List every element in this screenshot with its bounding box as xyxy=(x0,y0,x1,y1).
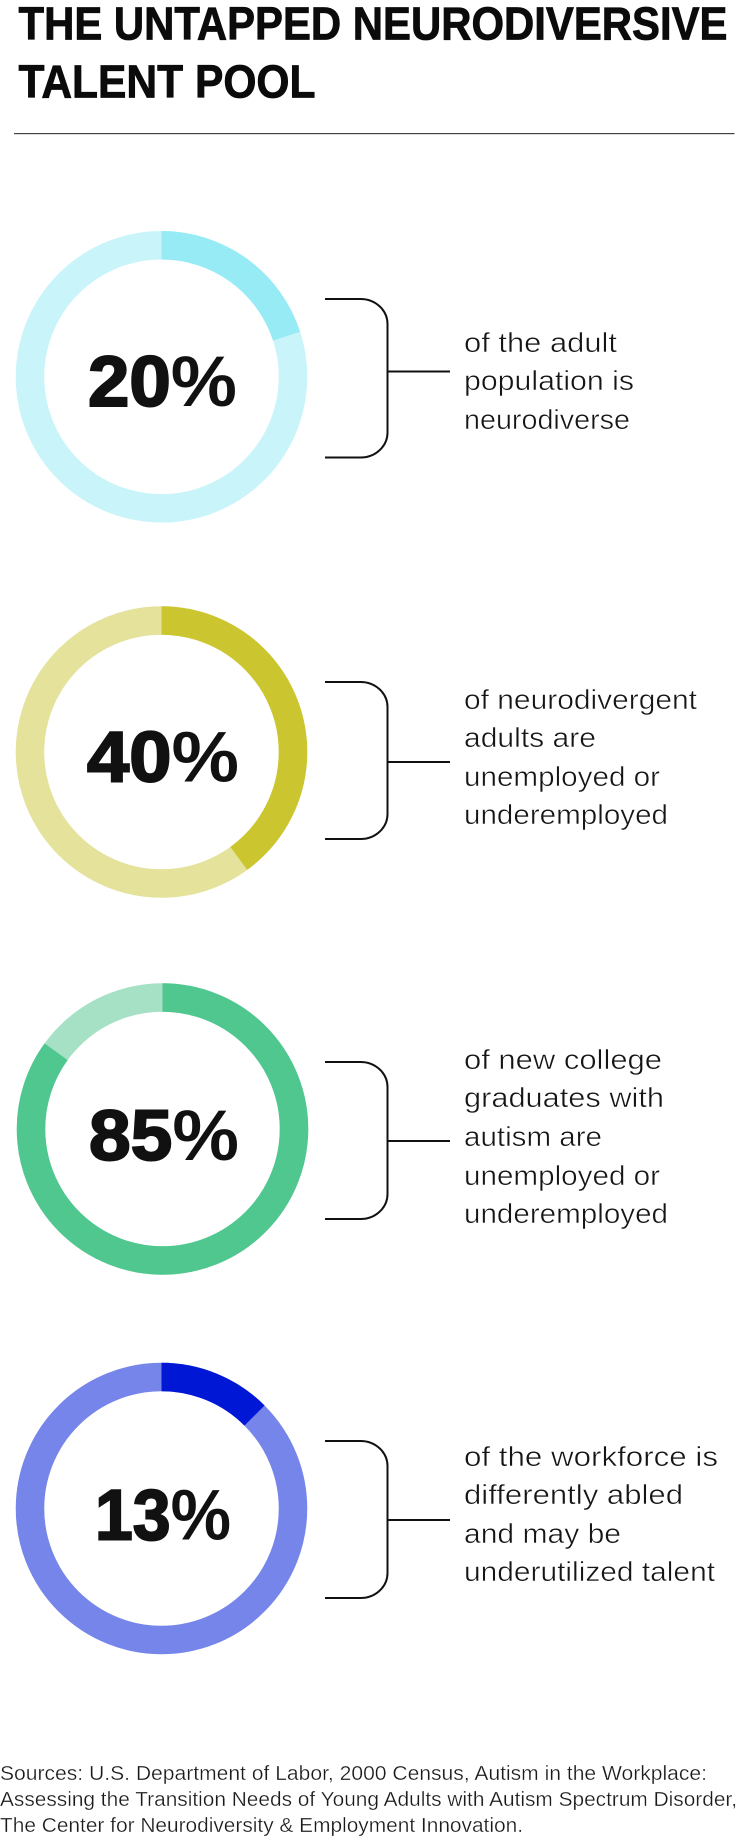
bracket connector xyxy=(325,299,450,458)
sources xyxy=(0,1762,737,1837)
donut chart: 13% xyxy=(30,1377,293,1640)
panel: 40% of neurodivergent adults xyxy=(30,620,697,884)
description text: underemployed xyxy=(464,1198,668,1229)
description text: underemployed xyxy=(464,799,668,830)
sources: Assessing the Transition Needs of Young Adults with Autism Spectrum Disorder, xyxy=(0,1788,737,1811)
bracket connector xyxy=(325,1062,450,1219)
bracket connector xyxy=(325,682,450,839)
donut chart: 20% xyxy=(30,245,293,508)
description text xyxy=(464,1044,668,1229)
stat: 85%: 85% xyxy=(89,1097,239,1176)
description text: of new college xyxy=(464,1044,662,1075)
stat: 40%: 40% xyxy=(87,718,239,798)
sources: Sources: U.S. Department of Labor, 2000 Census, Autism in the Workplace: xyxy=(0,1762,707,1785)
description text: and may be xyxy=(464,1518,621,1549)
panel: 85% of new college graduates with autism xyxy=(31,998,668,1260)
description text xyxy=(464,1441,718,1587)
description text: differently abled xyxy=(464,1479,683,1510)
description text: of neurodivergent xyxy=(464,684,697,715)
title: TALENT POOL xyxy=(18,55,316,107)
description text: graduates with xyxy=(464,1082,664,1113)
description text: of the adult xyxy=(464,327,617,358)
description text: unemployed or xyxy=(464,1160,660,1191)
description text: population is xyxy=(464,365,634,396)
description text: adults are xyxy=(464,722,596,753)
donut chart: 40% xyxy=(30,620,293,884)
stat: 13%: 13% xyxy=(95,1476,231,1556)
panel: 20% of adult population xyxy=(30,245,634,508)
stat: 20%: 20% xyxy=(88,343,237,422)
description text xyxy=(464,684,697,830)
description text: unemployed or xyxy=(464,761,660,792)
description text: neurodiverse xyxy=(464,404,630,435)
sources: The Center for Neurodiversity & Employment Innovation. xyxy=(0,1814,523,1837)
title xyxy=(18,0,728,107)
panel: 13% of the workforce xyxy=(30,1377,718,1640)
description text: autism are xyxy=(464,1121,602,1152)
donut chart: 85% xyxy=(31,998,294,1260)
description text: underutilized talent xyxy=(464,1556,715,1587)
description text: of the workforce is xyxy=(464,1441,718,1472)
description text xyxy=(464,327,634,435)
bracket connector xyxy=(325,1441,450,1598)
